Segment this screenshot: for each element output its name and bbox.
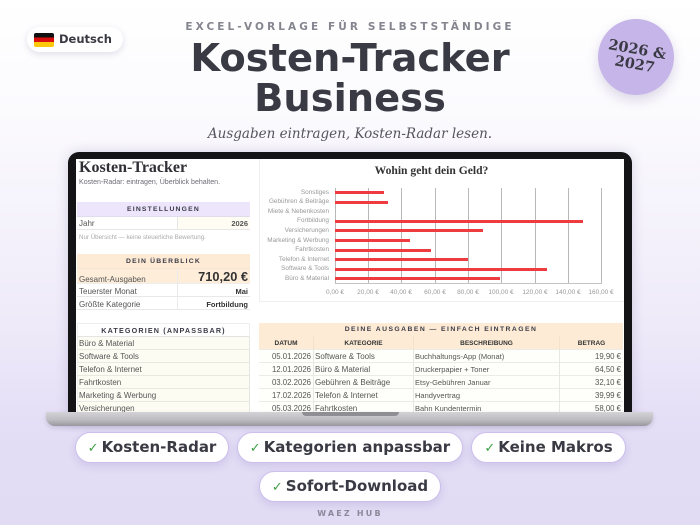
title: Kosten-Tracker [190, 36, 510, 81]
year badge text [607, 36, 668, 76]
title: Business [254, 76, 446, 121]
feature pill: Kosten-Radar [75, 432, 229, 463]
laptop base [46, 412, 653, 426]
category labels [267, 188, 329, 282]
category labels: Sonstiges [301, 188, 329, 196]
brand footer: WAEZ HUB [317, 509, 383, 518]
feature pill: Kosten-Radar: ✓Kosten-Radar [88, 438, 216, 456]
panel: Kategorien [77, 323, 250, 412]
icon: German flag [34, 33, 54, 47]
axis labels [326, 289, 614, 296]
table rows: 12.01.2026 [272, 365, 311, 374]
axis labels: 100,00 € [488, 289, 514, 296]
year value: 2026 [231, 219, 248, 228]
top month row [77, 284, 250, 297]
table rows: Büro & Material [315, 365, 370, 374]
category rows: Fahrtkosten [79, 378, 121, 387]
feature pill: Keine Makros [471, 432, 626, 463]
top month row: Teuerster Monat [79, 287, 137, 296]
table column headers [259, 336, 623, 350]
table column headers: BETRAG [578, 340, 605, 347]
category labels: Telefon & Internet [279, 256, 329, 263]
panel: Einstellungen [77, 202, 250, 241]
top category row: Größte Kategorie [79, 300, 140, 309]
sheet title: Kosten-Tracker [79, 159, 187, 176]
chart title: Wohin geht dein Geld? [375, 164, 488, 177]
top month value: Mai [235, 287, 248, 296]
top category value: Fortbildung [206, 300, 248, 309]
axis labels: 20,00 € [357, 289, 379, 296]
top category row [77, 297, 250, 310]
table rows: Handyvertrag [415, 391, 460, 400]
category labels: Marketing & Werbung [267, 236, 329, 244]
overview header: DEIN ÜBERBLICK [126, 258, 201, 265]
bars [335, 191, 583, 280]
year badge [598, 19, 674, 95]
table rows: 19,90 € [595, 352, 621, 361]
feature pill: Kategorien anpassbar: ✓Kategorien anpassbar [250, 438, 450, 456]
category labels: Miete & Nebenkosten [268, 208, 329, 215]
axis labels: 60,00 € [424, 289, 446, 296]
bar chart: Wohin geht dein Geld [259, 159, 624, 302]
panel: Dein Überblick [77, 254, 250, 310]
spreadsheet screen [76, 159, 624, 412]
total label: Gesamt-Ausgaben [79, 275, 146, 284]
table rows: Software & Tools [315, 352, 375, 361]
settings header: EINSTELLUNGEN [127, 206, 200, 213]
language label: Deutsch [59, 32, 112, 46]
table column headers: BESCHREIBUNG [460, 340, 513, 347]
year row [77, 217, 250, 230]
total value: 710,20 € [198, 269, 248, 284]
table title: DEINE AUSGABEN — EINFACH EINTRAGEN [345, 326, 537, 333]
category labels: Gebühren & Beiträge [269, 198, 329, 205]
category rows: Marketing & Werbung [79, 391, 156, 400]
category labels: Software & Tools [281, 265, 329, 272]
year row: Jahr [79, 219, 95, 228]
table rows: Etsy-Gebühren Januar [415, 378, 490, 387]
feature pill: Sofort-Download: ✓Sofort-Download [272, 477, 428, 495]
table rows: Gebühren & Beiträge [315, 378, 390, 387]
axis labels: 40,00 € [390, 289, 412, 296]
table rows: Druckerpapier + Toner [415, 365, 489, 374]
title [190, 36, 510, 121]
table rows: 32,10 € [595, 378, 621, 387]
axis labels: 160,00 € [588, 289, 614, 296]
language badge [27, 27, 123, 52]
year badge text: 2026 & [607, 36, 668, 63]
category labels: Fortbildung [297, 217, 329, 224]
table rows: 05.01.2026 [272, 352, 311, 361]
table column headers: KATEGORIE [344, 340, 383, 347]
feature pill: Keine Makros: ✓Keine Makros [484, 438, 613, 456]
total row [77, 269, 250, 284]
axis labels: 120,00 € [522, 289, 548, 296]
categories header: KATEGORIEN (ANPASSBAR) [101, 326, 226, 335]
panel: Deine Ausgaben table [259, 323, 623, 412]
table rows: 39,99 € [595, 391, 621, 400]
table rows: 17.02.2026 [272, 391, 311, 400]
table rows: 64,50 € [595, 365, 621, 374]
table rows [259, 350, 623, 412]
category rows: Software & Tools [79, 352, 139, 361]
table title [259, 323, 623, 336]
category labels: Versicherungen [285, 227, 329, 234]
axis labels: 0,00 € [326, 289, 344, 296]
categories header [77, 323, 250, 337]
settings header [77, 202, 250, 217]
table rows: Telefon & Internet [315, 391, 378, 400]
note: Nur Übersicht — keine steuerliche Bewertung. [79, 234, 206, 241]
axis labels: 80,00 € [457, 289, 479, 296]
category rows: Telefon & Internet [79, 365, 142, 374]
laptop notch [302, 412, 399, 416]
category labels: Fahrtkosten [295, 246, 329, 253]
feature pill: Sofort-Download [259, 471, 441, 502]
laptop screen frame [68, 152, 632, 422]
sheet subtitle: Kosten-Radar: eintragen, Überblick behalten. [79, 179, 220, 186]
table rows: Buchhaltungs-App (Monat) [415, 352, 504, 361]
category rows [77, 337, 250, 412]
overview header [77, 254, 250, 269]
feature pill: Kategorien anpassbar [237, 432, 463, 463]
axis labels: 140,00 € [555, 289, 581, 296]
table rows: 03.02.2026 [272, 378, 311, 387]
category labels: Büro & Material [285, 275, 329, 282]
tagline: Ausgaben eintragen, Kosten-Radar lesen. [208, 126, 492, 142]
table column headers: DATUM [274, 340, 298, 347]
category rows: Büro & Material [79, 339, 134, 348]
year value [177, 217, 250, 230]
eyebrow heading: EXCEL-VORLAGE FÜR SELBSTSTÄNDIGE [185, 21, 515, 33]
year badge text: 2027 [613, 53, 656, 76]
